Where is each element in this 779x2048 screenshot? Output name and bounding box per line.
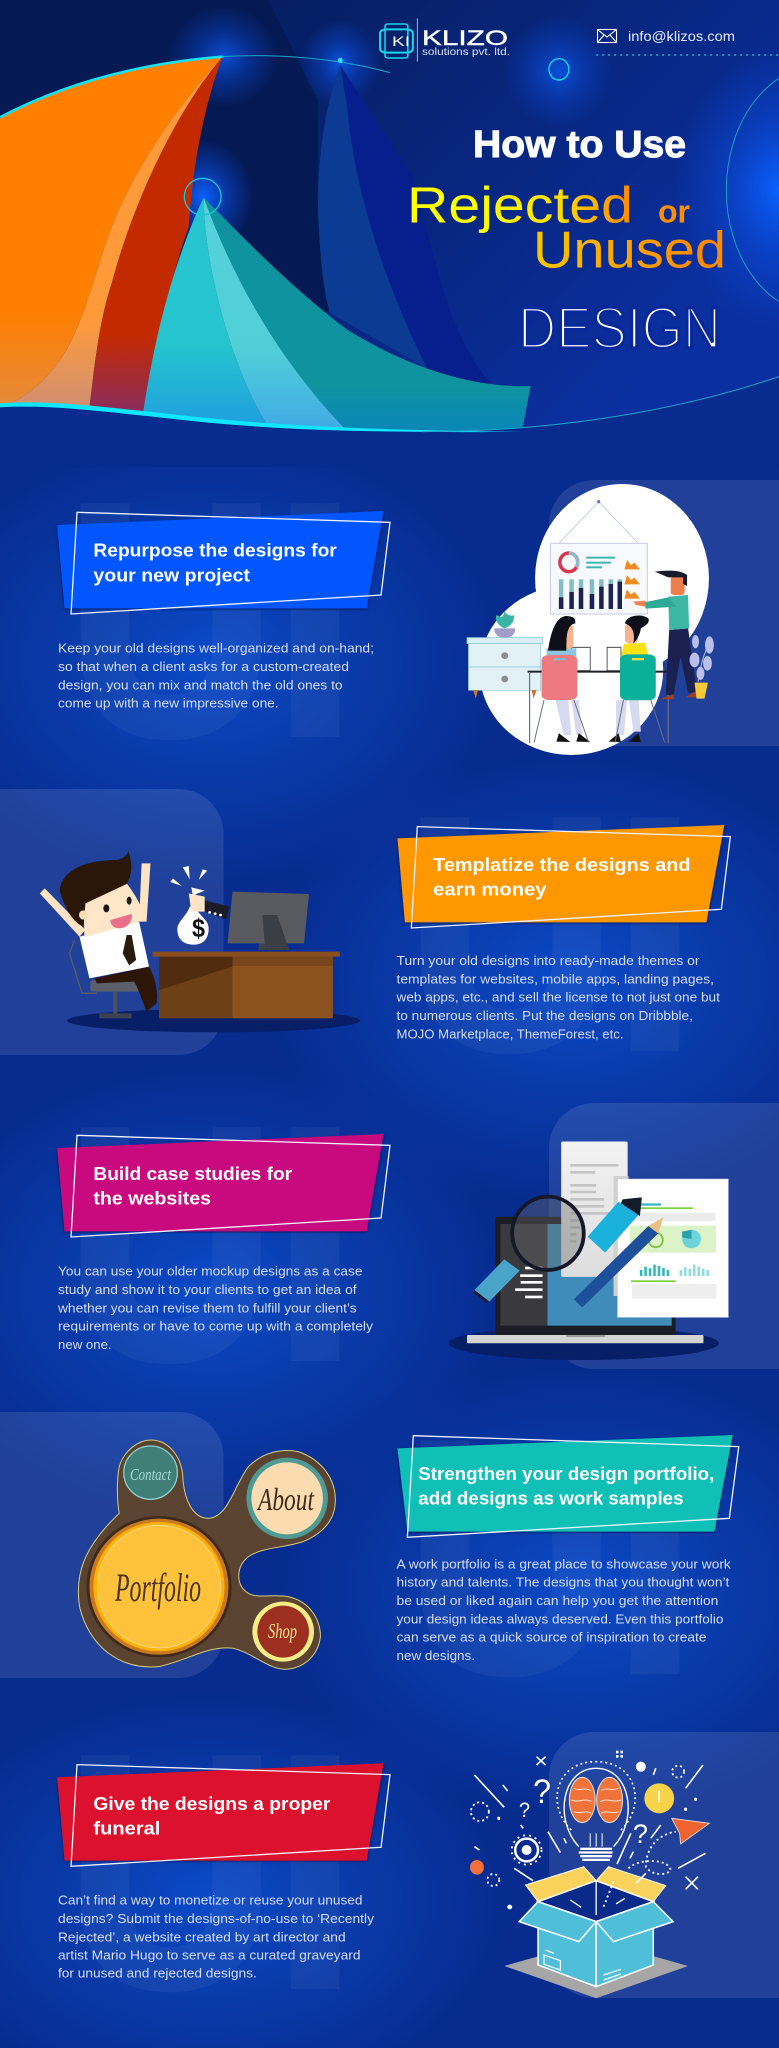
body text: be used or liked again can help you get the attention	[396, 1593, 718, 1608]
body text	[57, 1264, 374, 1352]
section 1: repurpose	[57, 436, 779, 803]
body text: You can use your older mockup designs as a case	[58, 1264, 362, 1279]
motion lines	[183, 866, 190, 879]
side panel	[549, 1103, 779, 1369]
decorative UI letters: UI	[67, 1060, 355, 1427]
title: Rejected	[407, 176, 633, 234]
body text: so that when a client asks for a custom-created	[58, 659, 349, 674]
back paper	[561, 1142, 627, 1277]
body text: requirements or have to come up with a completely	[58, 1319, 374, 1334]
body text	[396, 1556, 731, 1663]
heading banner	[57, 1763, 390, 1866]
body text: can serve as a quick source of inspiration to create	[396, 1630, 706, 1645]
body text: study and show it to your clients to get an idea of	[58, 1282, 357, 1297]
yellow badge, dart, dot	[644, 1783, 674, 1813]
body text: Keep your old designs well-organized and on-hand;	[58, 641, 374, 656]
body text: new one.	[58, 1337, 112, 1352]
plant right	[698, 640, 711, 682]
body text: design, you can mix and match the old ones to	[58, 677, 343, 692]
logo: KI	[392, 33, 410, 49]
section 3: case studies	[57, 1060, 779, 1427]
hero artwork: sails	[0, 0, 779, 467]
body text: MOJO Marketplace, ThemeForest, etc.	[396, 1026, 624, 1041]
body text: templates for websites, mobile apps, landing pages,	[396, 971, 714, 986]
head	[83, 883, 144, 937]
plant on dresser	[496, 612, 514, 628]
title: or	[658, 194, 690, 230]
monitor	[258, 915, 289, 950]
decorative UI letters: UI	[67, 436, 355, 803]
shirt and tie	[79, 922, 149, 978]
desk	[159, 957, 233, 1018]
logo: solutions pvt. ltd.	[422, 46, 510, 58]
title	[407, 124, 726, 361]
heading banner: your new project	[93, 566, 250, 586]
body text: for unused and rejected designs.	[58, 1966, 257, 1981]
icon: envelope	[598, 30, 616, 42]
body text: your design ideas always deserved. Even this portfolio	[396, 1611, 723, 1626]
heading banner: funeral	[93, 1818, 160, 1838]
illustration: portfolio bubbles: Contact	[130, 1465, 172, 1484]
heading banner	[57, 511, 390, 614]
illustration: team meeting	[467, 484, 714, 755]
illustration: portfolio bubbles: Portfolio	[114, 1565, 201, 1610]
body text: come up with a new impressive one.	[58, 696, 279, 711]
heading banner: Give the designs a proper	[93, 1794, 330, 1814]
illustration: portfolio bubbles: About	[257, 1481, 315, 1517]
body text: history and talents. The designs that you thought won’t	[396, 1575, 730, 1590]
decorative UI letters: UI	[67, 1688, 355, 2048]
illustration: portfolio bubbles	[78, 1440, 335, 1669]
illustration: idea box: ?	[533, 1773, 551, 1811]
logo	[380, 18, 510, 62]
bubble shape	[78, 1440, 335, 1669]
body text: designs? Submit the designs-of-no-use to ‘Recently	[58, 1911, 375, 1926]
heading banner: earn money	[433, 880, 546, 900]
magnifier	[512, 1197, 584, 1270]
illustration: laptop with documents	[449, 1142, 728, 1360]
hero lines and rings	[0, 55, 779, 432]
decorative UI letters: UI	[407, 1373, 695, 1740]
illustration: man selling from desk	[40, 851, 360, 1032]
man presenting	[666, 628, 697, 695]
body text: A work portfolio is a great place to showcase your work	[396, 1556, 731, 1571]
decorative UI letters: UI	[407, 750, 695, 1117]
body text	[395, 953, 720, 1041]
heading banner: Strengthen your design portfolio,	[418, 1464, 714, 1484]
body text: artist Mario Hugo to serve as a curated graveyard	[58, 1948, 360, 1963]
title: How to Use	[473, 124, 686, 166]
illustration: portfolio bubbles: Shop	[268, 1619, 297, 1643]
gear	[515, 1839, 538, 1861]
background glows	[0, 430, 779, 2048]
side panel	[549, 480, 779, 746]
bulb	[564, 1768, 628, 1847]
heading banner	[57, 1134, 390, 1237]
pencil	[574, 1226, 658, 1307]
dashes	[474, 1757, 705, 1889]
heading banner: add designs as work samples	[418, 1488, 684, 1508]
heading banner	[397, 1435, 739, 1537]
body text: web apps, etc., and sell the license to not just one but	[395, 990, 720, 1005]
section 2: templatize	[0, 750, 730, 1117]
side panel	[0, 789, 224, 1055]
contact email: info@klizos.com	[628, 28, 735, 44]
illustration: man selling from desk: $	[192, 913, 205, 943]
table	[571, 647, 590, 671]
body text: whether you can revise them to fulfill your client’s	[57, 1300, 357, 1315]
body text: Can’t find a way to monetize or reuse your unused	[58, 1893, 362, 1908]
logo: KLIZO	[422, 27, 508, 50]
title: Unused	[533, 222, 726, 280]
illustration: idea box: ?	[519, 1799, 530, 1822]
body text: new designs.	[396, 1648, 475, 1663]
box faces	[538, 1902, 596, 1987]
legs	[94, 967, 157, 1012]
heading banner: the websites	[93, 1188, 211, 1208]
dotted rings	[471, 1766, 684, 1907]
highlighter	[588, 1202, 638, 1253]
heading banner	[397, 825, 730, 928]
box back flaps	[526, 1867, 596, 1902]
body text: Turn your old designs into ready-made themes or	[396, 953, 700, 968]
hero background	[0, 0, 779, 440]
chair	[70, 940, 97, 993]
front paper	[614, 1176, 628, 1296]
heading banner: Repurpose the designs for	[93, 541, 337, 561]
side panel	[0, 1412, 224, 1678]
arms	[40, 888, 85, 937]
hero banner	[0, 0, 779, 467]
title: DESIGN	[518, 296, 721, 361]
illustration: idea box	[470, 1751, 709, 1998]
woman 1	[555, 700, 571, 735]
body text: to numerous clients. Put the designs on Dribbble,	[396, 1008, 693, 1023]
illustration: idea box: ?	[633, 1819, 648, 1849]
section 4: portfolio	[0, 1373, 739, 1740]
heading banner: Build case studies for	[93, 1164, 292, 1184]
arm and bag	[204, 900, 230, 919]
woman 2	[616, 700, 627, 735]
icon: klizo mark	[380, 18, 417, 62]
body text	[58, 641, 374, 711]
section 5: funeral	[57, 1688, 779, 2048]
body text: Rejected’, a website created by art director and	[58, 1929, 346, 1944]
side panel	[549, 1732, 779, 1998]
heading banner: Templatize the designs and	[433, 855, 690, 875]
body text	[58, 1893, 375, 1981]
